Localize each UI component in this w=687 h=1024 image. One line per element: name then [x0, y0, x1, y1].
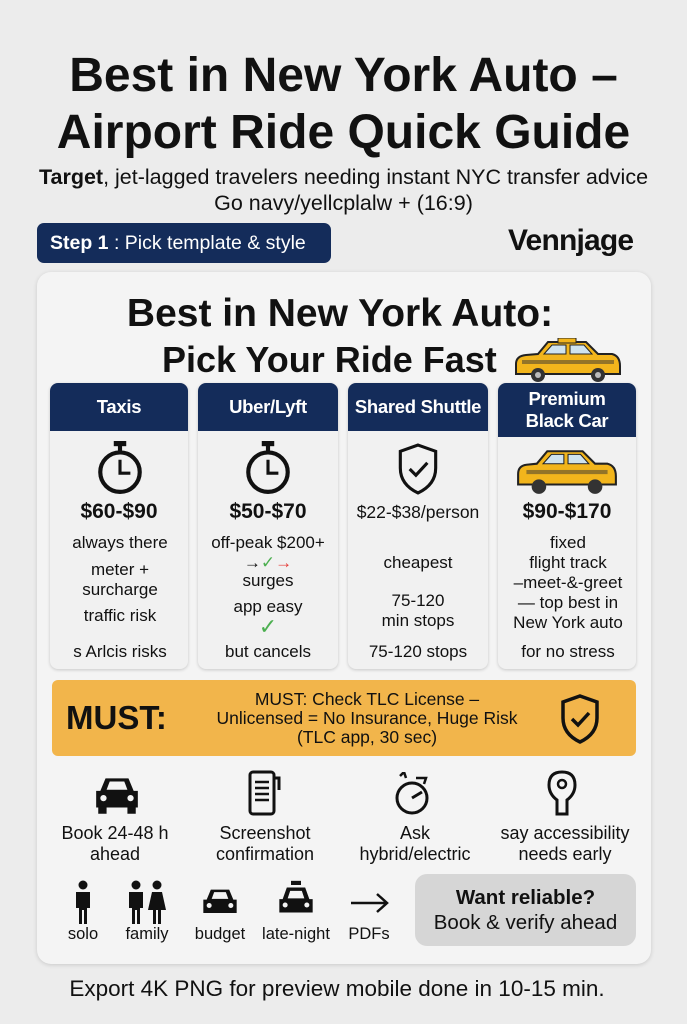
column: shuttle: min stops — [382, 611, 454, 630]
icon: stopwatch — [246, 441, 290, 494]
column: shuttle: $22-$38/person — [357, 502, 479, 522]
footer: Export 4K PNG for preview mobile done in 10-15 min. — [69, 976, 605, 1001]
callout: want reliable: Book & verify ahead — [434, 911, 617, 934]
icon: taxi — [515, 338, 621, 382]
column: uber/lyft: app easy — [234, 597, 302, 616]
column: premium black car: $90-$170 — [523, 500, 611, 523]
icon: car — [96, 778, 138, 814]
icon: budget car — [203, 890, 237, 913]
column: taxis: surcharge — [82, 580, 158, 599]
icon: stopwatch — [98, 441, 142, 494]
persona row: family — [125, 925, 169, 943]
column: uber/lyft: →✓→ — [244, 553, 292, 572]
tips row: Ask — [400, 823, 430, 843]
icon: clock arrows — [396, 772, 428, 814]
column: shuttle: cheapest — [384, 553, 452, 572]
column: premium black car: –meet-&-greet — [514, 573, 622, 592]
panel heading: Pick Your Ride Fast — [162, 339, 497, 380]
subtitle — [39, 165, 648, 215]
column: taxis: s Arlcis risks — [73, 642, 167, 661]
column: premium black car — [498, 383, 636, 669]
column: shuttle: 75-120 stops — [369, 642, 467, 661]
main panel — [37, 272, 651, 964]
icon: pin — [548, 770, 576, 816]
icon: late-night taxi — [279, 880, 313, 912]
column: shuttle: 75-120 — [392, 591, 444, 610]
icon: family — [129, 880, 166, 924]
callout: MUST banner: MUST: Check TLC License – — [255, 689, 479, 709]
title: Airport Ride Quick Guide — [57, 106, 630, 159]
title: Best in New York Auto – — [69, 49, 618, 102]
column: shuttle: Shared Shuttle — [355, 396, 481, 417]
icon: taxi — [517, 450, 617, 494]
column: taxis: always there — [72, 533, 168, 552]
persona row: PDFs — [348, 925, 390, 943]
logo: Vennjage — [508, 224, 633, 257]
title — [57, 49, 630, 159]
icon: document — [248, 770, 280, 816]
column: taxis: traffic risk — [84, 606, 156, 625]
persona row: budget — [195, 925, 245, 943]
tip labels: ahead — [90, 844, 140, 864]
column: uber/lyft: but cancels — [225, 642, 311, 661]
column: premium black car: flight track — [529, 553, 607, 572]
tips row: hybrid/electric — [359, 844, 471, 864]
icon: shield check — [561, 694, 599, 744]
column: premium black car: Black Car — [526, 410, 608, 431]
tips row: Screenshot — [219, 823, 311, 843]
tips row: needs early — [518, 844, 612, 864]
column: uber/lyft: off-peak $200+ — [211, 533, 325, 552]
icon: solo — [76, 880, 90, 924]
callout: MUST banner — [52, 680, 636, 756]
subtitle: Target, jet-lagged travelers needing instant NYC transfer advice — [39, 165, 648, 189]
column: premium black car: Premium — [528, 388, 606, 409]
tip labels — [61, 823, 169, 864]
column: uber/lyft: Uber/Lyft — [229, 396, 307, 417]
tip labels: Book 24-48 h — [61, 823, 169, 843]
step badge — [37, 223, 331, 263]
column: uber/lyft: $50-$70 — [229, 500, 307, 523]
column: taxis: $60-$90 — [80, 500, 158, 523]
icon: shield — [398, 443, 438, 495]
step badge: Step 1 : Pick template & style — [50, 232, 306, 254]
tips row — [61, 770, 630, 864]
column: uber/lyft: ✓ — [259, 614, 277, 639]
panel heading: Best in New York Auto: — [127, 292, 553, 335]
subtitle: Go navy/yellcplalw + (16:9) — [214, 191, 473, 215]
column: taxis: meter + — [91, 560, 149, 579]
callout: want reliable — [415, 874, 636, 946]
callout: MUST banner: Unlicensed = No Insurance, Huge Risk — [216, 708, 518, 728]
column: premium black car: New York auto — [513, 613, 623, 632]
persona row: solo — [68, 925, 98, 943]
column: premium black car: for no stress — [521, 642, 615, 661]
tips row: confirmation — [216, 844, 314, 864]
column: shuttle — [348, 383, 488, 669]
callout: MUST banner: (TLC app, 30 sec) — [297, 727, 437, 747]
column: uber/lyft: surges — [242, 571, 294, 590]
column: premium black car: — top best in — [518, 593, 618, 612]
column: premium black car: fixed — [550, 533, 586, 552]
arrow — [351, 893, 389, 913]
panel heading — [127, 292, 553, 380]
callout: MUST banner: MUST: — [66, 699, 167, 736]
tips row: say accessibility — [500, 823, 630, 843]
callout: want reliable: Want reliable? — [456, 886, 595, 909]
persona row — [68, 880, 390, 943]
column: taxis: Taxis — [97, 396, 141, 417]
column: taxis — [50, 383, 188, 669]
column: uber/lyft — [198, 383, 338, 669]
persona row: late-night — [262, 925, 330, 943]
